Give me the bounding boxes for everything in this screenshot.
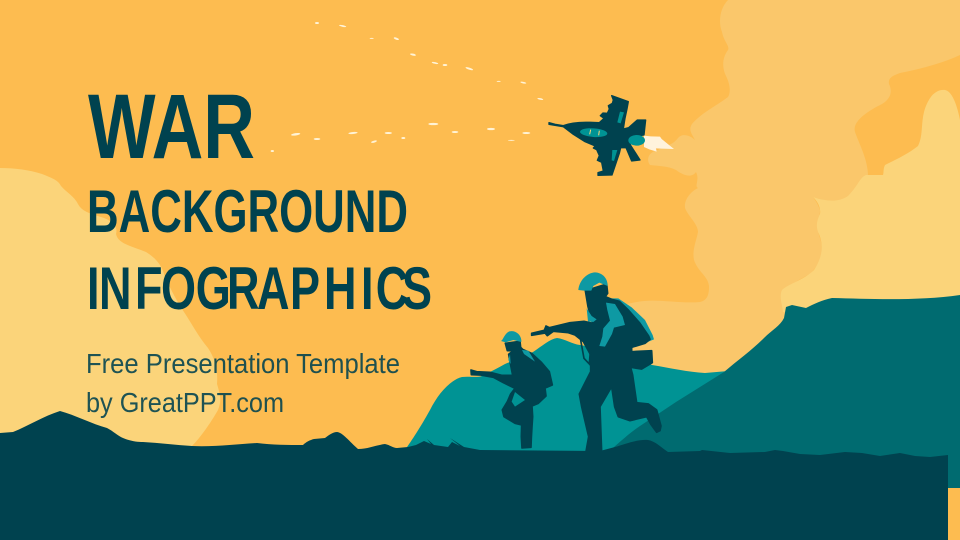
title: INFOGRAPHICS: INFOGRAPHICS xyxy=(87,256,432,323)
bullet tracer trails xyxy=(271,22,543,152)
fighter jet xyxy=(549,96,674,175)
subtitle line 2: by GreatPPT.com xyxy=(86,387,284,418)
title: WAR: WAR xyxy=(88,76,255,178)
title: BACKGROUND: BACKGROUND xyxy=(87,178,408,245)
mountain: dark teal ridge xyxy=(607,295,960,488)
subtitle line 1: Free Presentation Template xyxy=(86,348,400,379)
ground silhouette xyxy=(0,411,948,540)
mountain: mid teal ridge xyxy=(405,338,740,460)
soldier: front, advancing with rifle xyxy=(532,272,661,452)
smoke cloud: lighter right bank xyxy=(781,90,960,312)
smoke cloud: right column xyxy=(590,0,960,420)
smoke cloud: left bank xyxy=(0,168,220,446)
soldier: rear, crouched runner xyxy=(471,331,552,448)
